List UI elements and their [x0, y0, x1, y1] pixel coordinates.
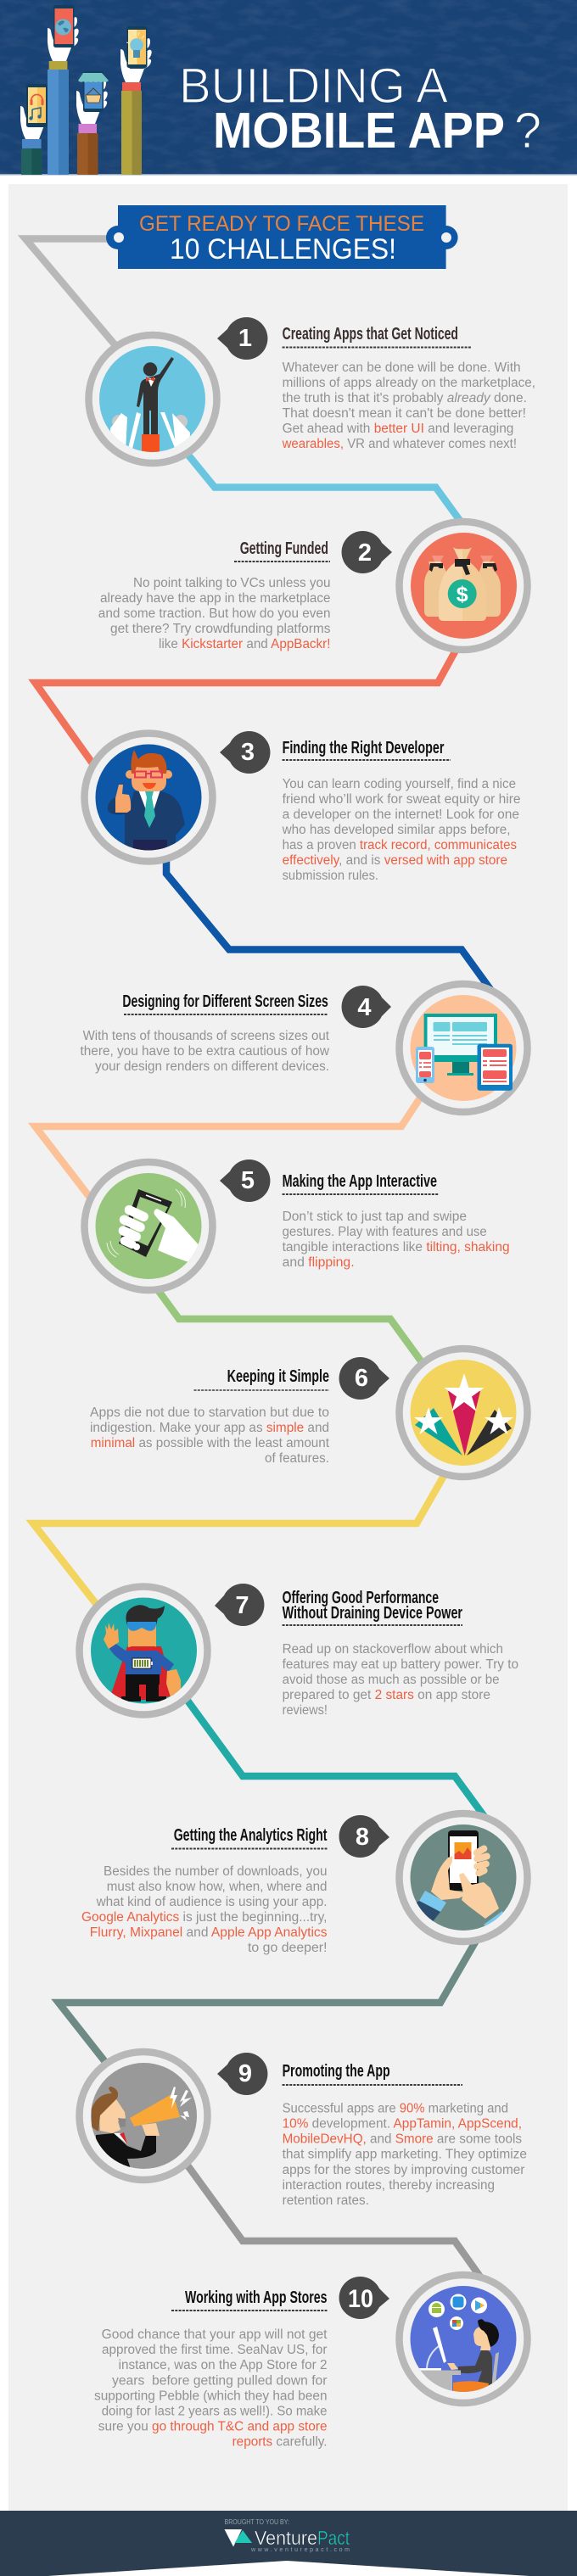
body text: No point talking to VCs unless you [133, 576, 331, 590]
body text: a developer on the internet! Look for one [283, 807, 519, 822]
number bubble 6: 6 [355, 1365, 368, 1392]
body text: Google Analytics is just the beginning...try, [81, 1910, 328, 1925]
body text: Get ahead with better UI and leveraging [283, 422, 513, 436]
body text: submission rules. [283, 869, 378, 883]
header banner [0, 0, 577, 175]
body text: and some traction. But how do you even [98, 606, 331, 621]
step 8: Getting the Analytics Right [81, 1813, 528, 1955]
body text: Whatever can be done will be done. With [283, 360, 521, 375]
body text: You can learn coding yourself, find a nice [283, 777, 516, 791]
title: Building a Mobile App? [179, 59, 541, 159]
number bubble 10: 10 [348, 2285, 373, 2313]
banner: get ready to face these 10 challenges: GET READY TO FACE THESE [139, 212, 424, 236]
body text: That doesn't mean it can't be done better! [283, 406, 526, 421]
number bubble 3: 3 [241, 739, 255, 766]
body text: supporting Pebble (which they had been [94, 2389, 328, 2403]
body text: sure you go through T&C and app store [98, 2420, 328, 2434]
body text: who has developed similar apps before, [282, 823, 511, 837]
body text [90, 1405, 330, 1466]
heading: Promoting the App [283, 2062, 390, 2081]
icon: hand shaking phone [85, 1162, 212, 1290]
body text: of features. [265, 1451, 329, 1466]
heading [283, 1589, 462, 1623]
body text: years before getting pulled down for [112, 2373, 328, 2388]
body text [283, 1642, 518, 1718]
step 6: Keeping it Simple [90, 1349, 528, 1477]
title: Building a Mobile App?: ? [514, 103, 541, 159]
connector paths [25, 239, 494, 2282]
body text: MobileDevHQ, and Smore are some tools [283, 2132, 522, 2147]
number bubble 3 [220, 731, 270, 774]
heading: Designing for Different Screen Sizes [122, 992, 328, 1011]
body text: friend who’ll work for sweat equity or hire [283, 792, 521, 807]
body text [283, 2102, 527, 2208]
number bubble 8: 8 [356, 1824, 369, 1851]
icon: developer thumbs up [85, 733, 212, 862]
logo: VenturePact: www.venturepact.com [250, 2547, 350, 2553]
heading: Working with App Stores [185, 2288, 328, 2307]
step 7: Offering Good Performance [80, 1584, 518, 1718]
body text: like Kickstarter and AppBackr! [159, 637, 331, 651]
arm 3: shop phone [76, 71, 109, 175]
body text: your design renders on different devices. [95, 1059, 329, 1074]
title: Building a Mobile App?: BUILDING A [179, 59, 448, 114]
footer chevron [48, 2561, 529, 2576]
body text: Besides the number of downloads, you [104, 1864, 328, 1879]
body text: Flurry, Mixpanel and Apple App Analytics [90, 1925, 328, 1940]
body text [94, 2327, 328, 2450]
number bubble 10 [339, 2277, 389, 2319]
body text: prepared to get 2 stars on app store [283, 1688, 490, 1702]
body text: gestures. Play with features and use [283, 1225, 487, 1239]
body text: to go deeper! [248, 1941, 328, 1955]
body text: apps for the stores by improving customer [283, 2163, 524, 2177]
number bubble 5: 5 [241, 1167, 255, 1194]
body text [98, 576, 331, 651]
heading: Offering Good Performance [283, 1589, 439, 1607]
step 5: Making the App Interactive [85, 1159, 510, 1290]
step 1: Creating Apps that Get Noticed [88, 317, 535, 463]
body text: features may eat up battery power. Try to [283, 1657, 518, 1672]
number bubble 8 [339, 1815, 389, 1858]
body text: what kind of audience is using your app. [96, 1895, 328, 1909]
number bubble 4: 4 [357, 994, 372, 1021]
body text: indigestion. Make your app as simple and [90, 1421, 329, 1435]
banner: get ready to face these 10 challenges: 10 CHALLENGES! [170, 233, 396, 265]
body text: With tens of thousands of screens sizes out [83, 1029, 330, 1043]
logo: VenturePact: Venture [255, 2527, 317, 2549]
body text [80, 1029, 330, 1074]
body text: get there? Try crowdfunding platforms [110, 622, 331, 636]
icon: money bags: $ [457, 583, 468, 606]
heading: Finding the Right Developer [283, 739, 445, 757]
footer [0, 2511, 577, 2576]
body text: Don’t stick to just tap and swipe [283, 1210, 467, 1224]
number bubble 1 [217, 317, 267, 360]
body text [282, 360, 535, 451]
arm 4: light bulb phone [120, 26, 154, 175]
step 2: Getting Funded [98, 522, 528, 651]
body text: Successful apps are 90% marketing and [283, 2102, 508, 2115]
body text: Apps die not due to starvation but due to [90, 1405, 329, 1420]
number bubble 5 [220, 1159, 270, 1202]
body text: has a proven track record, communicates [283, 838, 517, 852]
logo: VenturePact [224, 2527, 350, 2553]
number bubble 9: 9 [238, 2060, 252, 2087]
body text: the truth is that it's probably already done. [283, 391, 527, 405]
body text [81, 1864, 328, 1955]
body text [283, 1210, 510, 1270]
body text: minimal as possible with the least amount [91, 1436, 330, 1450]
title: Building a Mobile App?: MOBILE APP [213, 103, 505, 159]
body text: there, you have to be extra cautious of how [80, 1044, 330, 1059]
body text: wearables, VR and whatever comes next! [282, 437, 517, 451]
number bubble 4 [342, 986, 391, 1028]
body text: avoid those as much as possible or be [283, 1673, 499, 1687]
body text: tangible interactions like tilting, shaking [283, 1240, 510, 1254]
body text: reviews! [283, 1703, 328, 1718]
body text: approved the first time. SeaNav US, for [102, 2343, 328, 2357]
heading: Creating Apps that Get Noticed [283, 325, 458, 344]
body text: instance, was on the App Store for 2 [119, 2358, 328, 2372]
body text [282, 777, 521, 883]
body text: Good chance that your app will not get [102, 2327, 328, 2342]
number bubble 2 [342, 531, 392, 573]
step 3: Finding the Right Developer [85, 731, 521, 883]
icon: shooting stars [399, 1349, 528, 1477]
illustration: raised hands holding phones [20, 5, 154, 175]
number bubble 9 [217, 2053, 267, 2095]
credit: brought to you by: BROUGHT TO YOU BY: [224, 2518, 289, 2526]
body text: millions of apps already on the marketplace, [283, 376, 535, 390]
banner: get ready to face these 10 challenges [106, 205, 458, 269]
step 10: Working with App Stores [94, 2275, 528, 2450]
body text: must also know how, when, where and [107, 1880, 328, 1894]
number bubble 6 [339, 1357, 389, 1400]
heading: Without Draining Device Power [283, 1604, 462, 1623]
icon: money bags [399, 522, 528, 650]
heading: Getting Funded [240, 539, 328, 558]
body text: doing for last 2 years as well!). So make [102, 2404, 327, 2419]
logo: VenturePact: Pact [317, 2527, 350, 2549]
body text: already have the app in the marketplace [100, 591, 331, 606]
heading: Keeping it Simple [227, 1367, 329, 1386]
icon: developer with app store logos [399, 2275, 528, 2403]
body text: reports carefully. [232, 2435, 328, 2450]
body text: and flipping. [283, 1255, 355, 1270]
body text: interaction routes, thereby increasing [283, 2178, 495, 2193]
icon: analytics on phone [399, 1813, 528, 1942]
heading: Making the App Interactive [283, 1172, 437, 1191]
step 4: Designing for Different Screen Sizes [80, 984, 528, 1112]
icon: superhero with battery [80, 1586, 207, 1715]
icon: responsive devices [399, 984, 528, 1112]
step 9: Promoting the App [80, 2052, 527, 2208]
number bubble 7: 7 [235, 1592, 249, 1619]
arm 1: music phone [20, 84, 53, 175]
body text: that simplify app marketing. They optimize [283, 2148, 527, 2162]
body text: effectively, and is versed with app store [283, 853, 507, 868]
body text: retention rates. [283, 2193, 369, 2208]
number bubble 7 [215, 1584, 264, 1626]
number bubble 2: 2 [358, 539, 372, 567]
icon: man with megaphone [80, 2052, 207, 2180]
icon: person on pedestal [88, 335, 217, 463]
heading: Getting the Analytics Right [174, 1826, 328, 1845]
body text: Read up on stackoverflow about which [283, 1642, 503, 1657]
arm 2: globe phone [48, 5, 81, 175]
number bubble 1: 1 [238, 325, 252, 352]
body text: 10% development. AppTamin, AppScend, [283, 2117, 522, 2131]
